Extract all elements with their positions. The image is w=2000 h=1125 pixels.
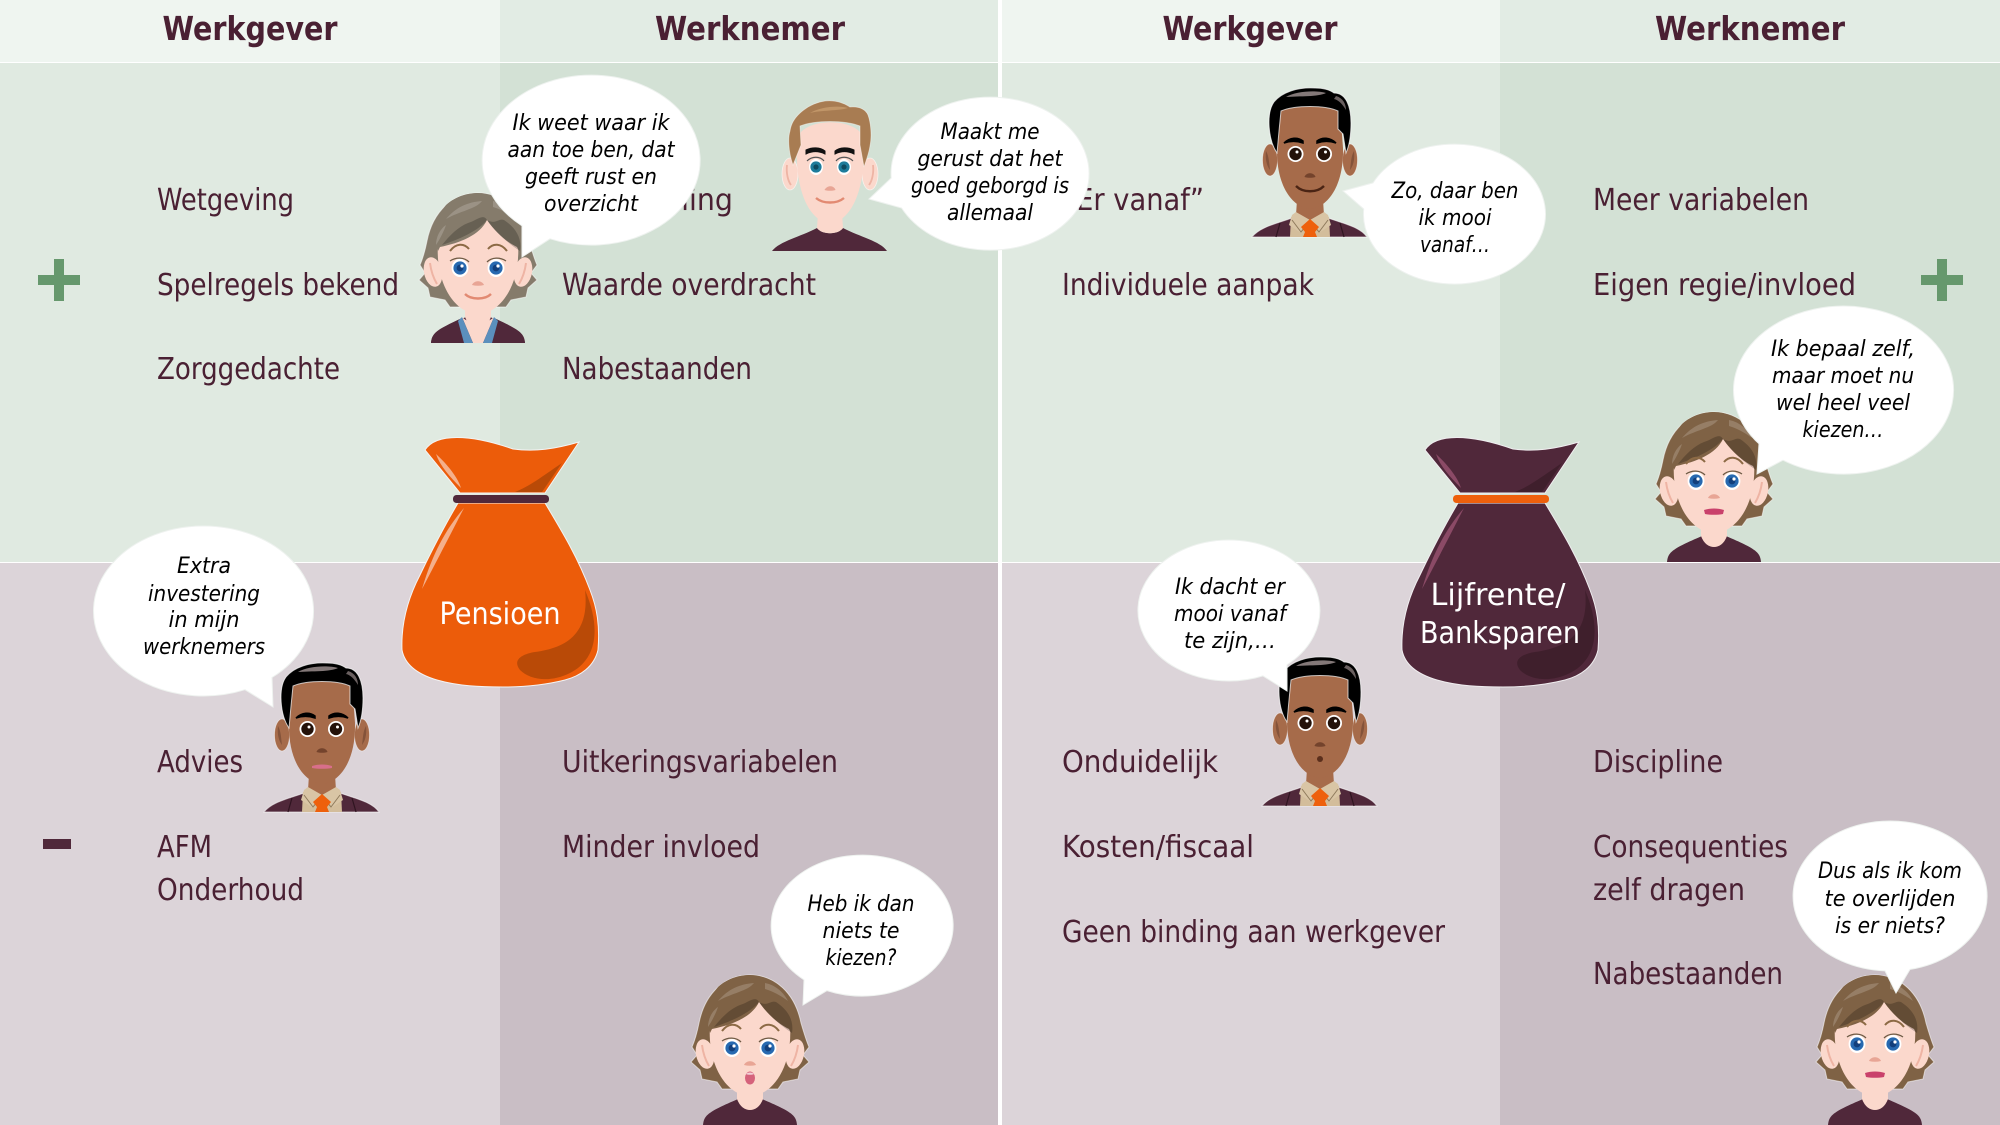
callout: Maakt me gerust: allemaal — [947, 201, 1033, 226]
callout: Ik bepaal zelf: maar moet nu — [1772, 364, 1914, 389]
callout: Heb ik dan niets te kiezen: kiezen? — [826, 946, 897, 971]
heading: Werknemer links: Werknemer — [655, 9, 846, 48]
text block: minpunten lijfrente werkgever — [1062, 745, 1446, 950]
panel: min Werknemer rechts — [1500, 563, 2000, 1125]
panel: min Werkgever rechts — [1002, 563, 1500, 1125]
panel: plus Werkgever links — [0, 63, 500, 562]
figure: vrouw verbaasd — [691, 975, 809, 1125]
icon: zak Lijfrente/Banksparen — [1402, 438, 1599, 687]
text block: minpunten lijfrente werknemer: zelf dragen — [1593, 873, 1745, 908]
callout: Dus als ik kom te overlijden: Dus als ik kom — [1818, 859, 1962, 884]
callout: Maakt me gerust: Maakt me — [940, 120, 1040, 145]
text block: minpunten pensioen werknemer: Minder invloed — [562, 830, 760, 865]
text block: pluspunten pensioen werkgever: Wetgeving — [157, 183, 294, 218]
panel: plus Werknemer rechts — [1500, 63, 2000, 562]
panel: plus Werknemer links — [500, 63, 998, 562]
callout: Zo, daar ben ik mooi vanaf — [1343, 144, 1545, 284]
icon: plus links — [38, 259, 80, 301]
text block: minpunten lijfrente werknemer: Discipline — [1593, 745, 1723, 780]
callout: Ik dacht er mooi vanaf te zijn: mooi vanaf — [1174, 602, 1289, 627]
icon: plus rechts — [1921, 259, 1963, 301]
text block: pluspunten pensioen werknemer: Waarde overdracht — [562, 268, 816, 303]
text block: pluspunten lijfrente werknemer: Eigen regie/invloed — [1593, 268, 1856, 303]
text block: minpunten pensioen werkgever: AFM — [157, 830, 212, 865]
panel: header Werkgever links — [0, 0, 500, 62]
heading: Werkgever links: Werkgever — [162, 9, 338, 48]
text block: minpunten lijfrente werknemer: Nabestaanden — [1593, 957, 1783, 992]
icon: min — [43, 839, 71, 849]
callout: Ik weet waar ik: Ik weet waar ik — [512, 111, 671, 136]
text block: pluspunten lijfrente werknemer — [1593, 183, 1856, 303]
panel: plus Werkgever rechts — [1002, 63, 1500, 562]
panel: min Werknemer links — [500, 563, 998, 1125]
text block: minpunten lijfrente werknemer — [1593, 745, 1788, 992]
text block: pluspunten pensioen werknemer: Nabestaanden — [562, 352, 752, 387]
callout: Ik weet waar ik: aan toe ben, dat — [508, 138, 676, 163]
callout: Heb ik dan niets te kiezen: niets te — [822, 919, 900, 944]
callout: Ik bepaal zelf: Ik bepaal zelf, — [1771, 337, 1915, 362]
panel: header Werknemer links — [500, 0, 998, 62]
callout: Extra investering — [94, 526, 314, 707]
text block: pluspunten pensioen werkgever: Zorggedachte — [157, 352, 340, 387]
icon: zak Pensioen — [402, 438, 599, 687]
text block: minpunten pensioen werkgever: Onderhoud — [157, 873, 304, 908]
callout: Dus als ik kom te overlijden: te overlijden — [1824, 887, 1956, 912]
callout: Ik dacht er mooi vanaf te zijn: te zijn,… — [1184, 629, 1276, 654]
icon: zak Lijfrente/Banksparen: Lijfrente/ — [1430, 578, 1566, 613]
callout: Ik bepaal zelf: kiezen… — [1802, 418, 1884, 443]
text block: minpunten lijfrente werknemer: Consequenties — [1593, 830, 1788, 865]
figure: man verbaasd — [1262, 657, 1377, 806]
panel: min Werkgever links — [0, 563, 500, 1125]
callout: Maakt me gerust: goed geborgd is — [911, 174, 1069, 199]
icon: zak Pensioen: Pensioen — [440, 597, 560, 632]
callout: Ik weet waar ik: geeft rust en — [525, 165, 657, 190]
figure: man met lach — [1252, 88, 1367, 237]
panel: header Werkgever rechts — [1002, 0, 1500, 62]
figure: man met bezorgde mond — [264, 663, 379, 812]
text block: pluspunten pensioen werkgever — [157, 183, 399, 387]
text block: minpunten pensioen werkgever — [157, 745, 304, 908]
callout: Extra investering: in mijn — [168, 608, 240, 633]
callout: Ik bepaal zelf — [1734, 306, 1954, 474]
figure: vrouw grijs haar — [419, 193, 537, 343]
text block: pluspunten lijfrente werkgever: Individuele aanpak — [1062, 268, 1315, 303]
callout: Ik weet waar ik — [482, 75, 700, 257]
callout: Zo, daar ben ik mooi vanaf: Zo, daar ben — [1391, 179, 1518, 204]
callout: Heb ik dan niets te kiezen — [771, 855, 953, 1005]
text block: pluspunten pensioen werknemer — [562, 183, 816, 387]
callout: Dus als ik kom te overlijden: is er niets? — [1835, 914, 1945, 939]
text block: pluspunten pensioen werknemer: Risicodeling — [562, 183, 733, 218]
callout: Extra investering: werknemers — [143, 635, 265, 660]
callout: Maakt me gerust: gerust dat het — [918, 147, 1064, 172]
callout: Ik dacht er mooi vanaf te zijn — [1138, 540, 1320, 691]
callout: Extra investering: investering — [148, 582, 260, 607]
text block: minpunten pensioen werkgever: Advies — [157, 745, 243, 780]
text block: pluspunten lijfrente werknemer: Meer variabelen — [1593, 183, 1809, 218]
text block: pluspunten pensioen werkgever: Spelregels bekend — [157, 268, 399, 303]
text block: minpunten pensioen werknemer — [562, 745, 838, 865]
panel: header Werknemer rechts — [1500, 0, 2000, 62]
callout: Extra investering: Extra — [177, 554, 231, 579]
figure: vrouw twijfelt — [1655, 412, 1773, 562]
figure: vrouw bezorgd — [1816, 975, 1934, 1125]
callout: Zo, daar ben ik mooi vanaf: ik mooi — [1418, 206, 1492, 231]
text block: pluspunten lijfrente werkgever — [1062, 183, 1315, 303]
text block: pluspunten lijfrente werkgever: “Er vanaf” — [1062, 183, 1204, 218]
text block: minpunten lijfrente werkgever: Onduidelijk — [1062, 745, 1219, 780]
callout: Zo, daar ben ik mooi vanaf: vanaf… — [1420, 233, 1490, 258]
heading: Werknemer rechts: Werknemer — [1655, 9, 1846, 48]
callout: Ik weet waar ik: overzicht — [544, 192, 639, 217]
text block: minpunten pensioen werknemer: Uitkeringsvariabelen — [562, 745, 838, 780]
figure: jonge man — [772, 101, 887, 251]
heading: Werkgever rechts: Werkgever — [1162, 9, 1338, 48]
callout: Heb ik dan niets te kiezen: Heb ik dan — [808, 892, 914, 917]
text block: minpunten lijfrente werkgever: Geen binding aan werkgever — [1062, 915, 1446, 950]
icon: zak Lijfrente/Banksparen: Banksparen — [1420, 616, 1580, 651]
callout: Ik dacht er mooi vanaf te zijn: Ik dacht er — [1175, 575, 1287, 600]
text block: minpunten lijfrente werkgever: Kosten/fiscaal — [1062, 830, 1254, 865]
callout: Dus als ik kom te overlijden — [1793, 821, 1987, 993]
callout: Ik bepaal zelf: wel heel veel — [1776, 391, 1910, 416]
callout: Maakt me gerust — [869, 97, 1089, 250]
